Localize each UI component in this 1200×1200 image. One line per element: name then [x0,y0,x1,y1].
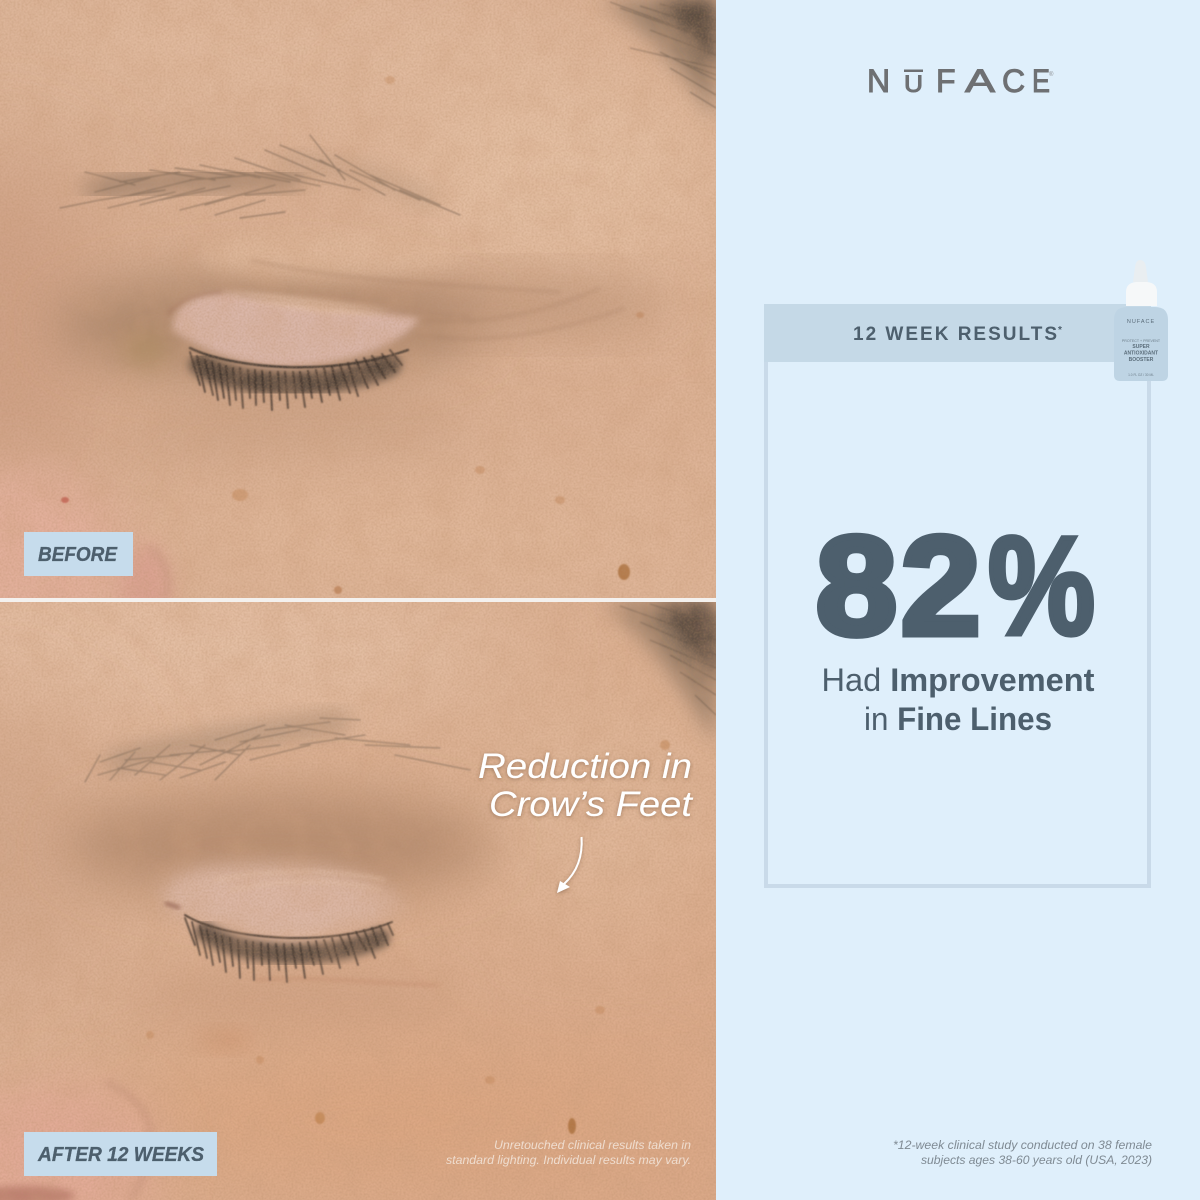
icon: serum bottle: NUFACE [1127,319,1155,325]
icon: serum bottle: 1.0 FL OZ / 30 ML [1128,373,1154,377]
callout: reduction in crow's feet [478,747,693,824]
white divider [0,598,716,602]
nose [122,550,166,598]
logo: NuFACE: F [936,63,956,99]
logo: NuFACE: N [867,63,890,99]
callout: reduction in crow's feet: Crow’s Feet [489,785,693,824]
nose [0,1082,160,1200]
logo: NuFACE: C [1002,63,1025,99]
label: before: BEFORE [38,544,118,566]
big stat [816,507,1095,664]
footnote: *12-week clinical study conducted on 38 female [893,1140,1152,1152]
icon: serum bottle: PROTECT + PREVENT [1122,339,1161,343]
asterisk: * [1058,325,1062,336]
callout: reduction in crow's feet: Reduction in [478,747,692,786]
logo: NuFACE [867,63,1054,99]
label: after 12 weeks: AFTER 12 WEEKS [37,1144,205,1166]
logo: NuFACE: E [1032,63,1050,99]
panel heading: 12 WEEK RESULTS [853,324,1057,345]
stat description [822,662,1095,737]
big stat: 8 [816,509,897,664]
freckles [61,76,644,594]
panel header band [764,304,1151,362]
arrow [557,837,582,893]
icon: serum bottle: BOOSTER [1129,357,1154,363]
eyebrow [60,135,460,218]
disclaimer: photo: standard lighting. Individual results may vary. [446,1155,691,1167]
disclaimer: photo [446,1140,691,1167]
footnote: subjects ages 38-60 years old (USA, 2023) [921,1155,1152,1167]
icon: serum bottle [1114,260,1168,381]
stat description: Had Improvement [822,662,1095,698]
lashes [190,348,408,410]
label: before [24,532,133,576]
label: after 12 weeks [24,1132,217,1176]
before photo [0,0,730,650]
logo: NuFACE: U [904,71,923,98]
eyelid [165,864,440,985]
logo: NuFACE: A [965,63,996,99]
panel: 12 week results [764,304,1151,886]
brow ridge highlight [209,237,442,284]
stat description: in Fine Lines [864,701,1052,737]
eyelid [170,260,420,370]
eyebrow [85,718,470,782]
icon: serum bottle: SUPER [1132,344,1150,350]
freckles [146,740,670,1134]
disclaimer: photo: Unretouched clinical results taken in [494,1140,691,1152]
big stat: % [988,507,1095,664]
after photo [0,602,730,1200]
logo: NuFACE: ® [1049,71,1054,78]
icon: serum bottle: ANTIOXIDANT [1124,350,1158,356]
lashes [185,915,393,982]
eye socket shading [65,790,495,900]
big stat: 2 [901,507,980,664]
hair [605,602,716,745]
eye socket shading [55,270,485,380]
hair [600,0,716,120]
footnote [893,1140,1152,1167]
panel border [766,306,1149,886]
